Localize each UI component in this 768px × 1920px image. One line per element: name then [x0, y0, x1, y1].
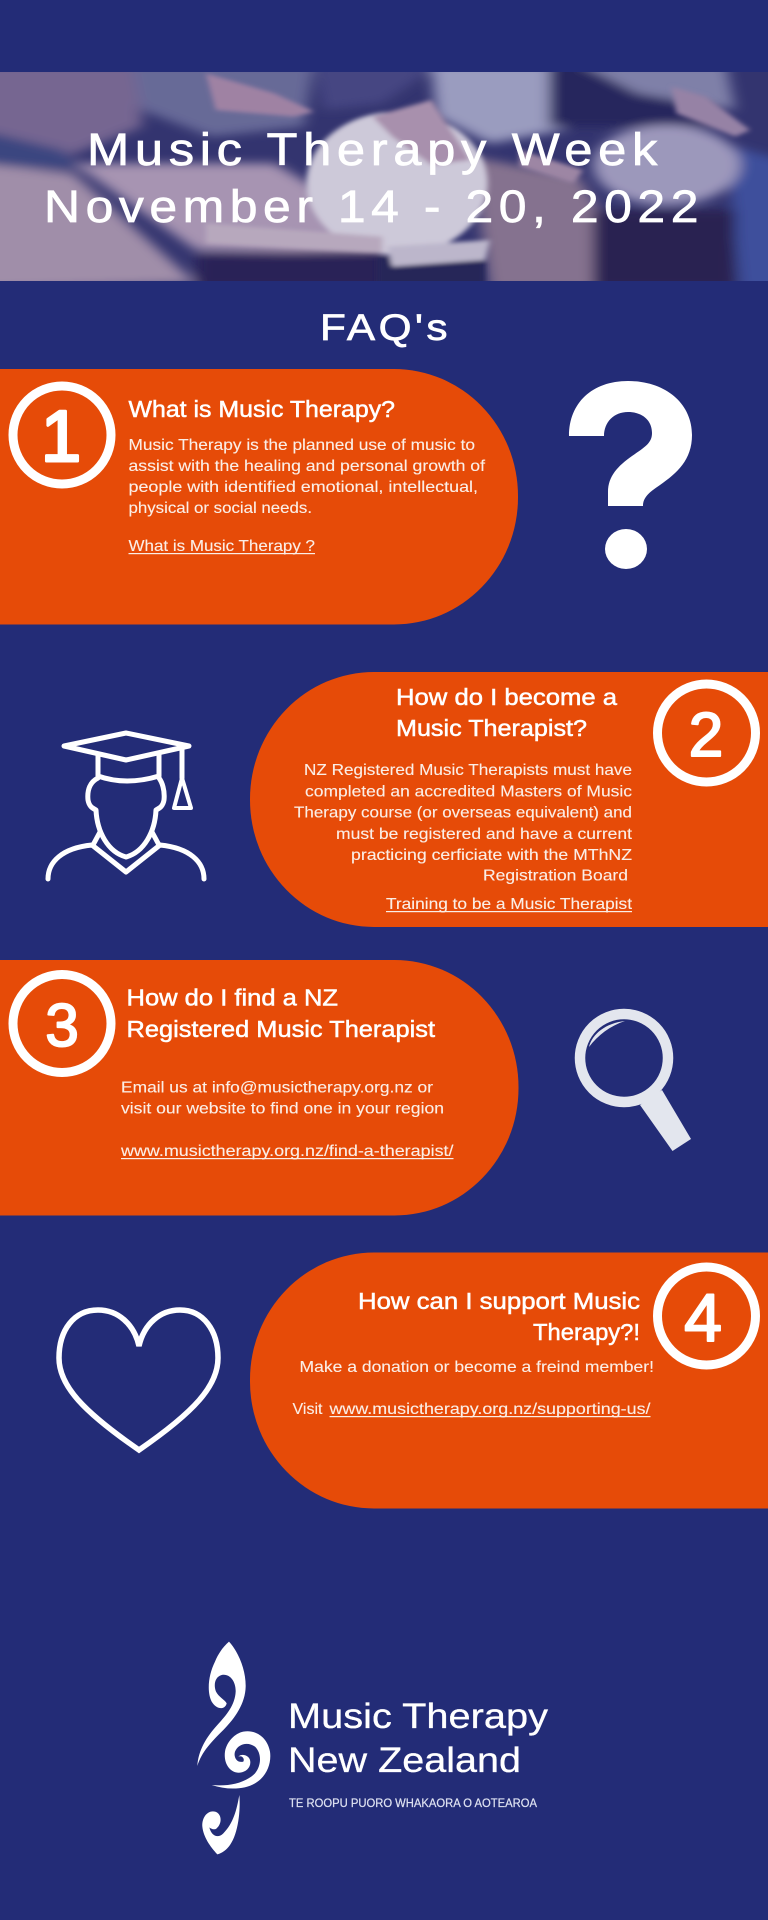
link 2: Training to be a Music Therapist	[386, 896, 633, 913]
body 1: physical or social needs.	[128, 500, 312, 517]
heading 3	[126, 984, 436, 1042]
heading 2: How do I become a	[396, 684, 617, 710]
body 1: people with identified emotional, intellectual,	[128, 479, 478, 496]
link 4: www.musictherapy.org.nz/supporting-us/	[328, 1401, 651, 1418]
body 4: Make a donation or become a freind member!	[300, 1359, 654, 1376]
heading 1: What is Music Therapy?	[128, 396, 395, 422]
body 2: Registration Board	[483, 868, 628, 884]
badge 1: 1	[41, 397, 81, 477]
icon: graduate	[48, 733, 204, 879]
link 1: What is Music Therapy ?	[128, 538, 315, 555]
body 2: must be registered and have a current	[336, 826, 633, 843]
title: November 14 - 20, 2022	[44, 181, 704, 232]
banner photo: hands on drums	[0, 63, 768, 290]
body 1: assist with the healing and personal growth of	[128, 458, 486, 475]
logo wordmark: New Zealand	[288, 1741, 521, 1780]
body 3	[121, 1080, 444, 1118]
badge 3	[13, 974, 111, 1072]
link 4: Visit	[292, 1401, 323, 1418]
body 2: completed an accredited Masters of Music	[305, 784, 632, 800]
body 2: NZ Registered Music Therapists must have	[304, 762, 632, 779]
logo: Music Therapy New Zealand	[197, 1642, 549, 1854]
body 2	[294, 762, 633, 884]
body 2: practicing cerficiate with the MThNZ	[351, 847, 632, 864]
logo wordmark	[288, 1697, 549, 1780]
heading 4: Therapy?!	[533, 1319, 640, 1345]
body 2: Therapy course (or overseas equivalent) and	[294, 804, 632, 822]
heading 4	[358, 1288, 640, 1345]
heading 2: Music Therapist?	[396, 715, 587, 741]
heading 3: Registered Music Therapist	[126, 1016, 436, 1042]
link 3: www.musictherapy.org.nz/find-a-therapist/	[120, 1143, 454, 1160]
panel 2: how do I become a music therapist	[250, 672, 768, 927]
logo tagline: TE ROOPU PUORO WHAKAORA O AOTEAROA	[289, 1798, 537, 1810]
body 1	[128, 437, 486, 517]
panel 1: what is music therapy	[0, 369, 518, 624]
icon: question mark	[569, 381, 692, 569]
heading 2	[396, 684, 617, 741]
body 3: visit our website to find one in your region	[121, 1100, 444, 1118]
badge 1	[13, 386, 111, 484]
logo wordmark: Music Therapy	[288, 1697, 549, 1736]
heading: FAQ's: FAQ's	[320, 307, 451, 348]
title: Music Therapy Week	[87, 124, 663, 175]
body 1: Music Therapy is the planned use of music to	[128, 437, 475, 454]
icon: magnifying glass	[580, 1014, 691, 1151]
heading 4: How can I support Music	[358, 1288, 640, 1314]
badge 2	[658, 684, 756, 782]
panel 4: how can I support music therapy	[250, 1252, 768, 1508]
heading 3: How do I find a NZ	[126, 984, 338, 1010]
icon: heart	[59, 1310, 218, 1450]
title	[44, 124, 704, 232]
panel 3: how do I find a therapist	[0, 960, 518, 1216]
badge 4	[658, 1267, 756, 1365]
body 3: Email us at info@musictherapy.org.nz or	[121, 1080, 434, 1096]
badge 3: 3	[45, 992, 79, 1059]
badge 4: 4	[684, 1280, 722, 1356]
logo mark: koru treble clef	[197, 1642, 270, 1854]
badge 2: 2	[689, 701, 723, 770]
